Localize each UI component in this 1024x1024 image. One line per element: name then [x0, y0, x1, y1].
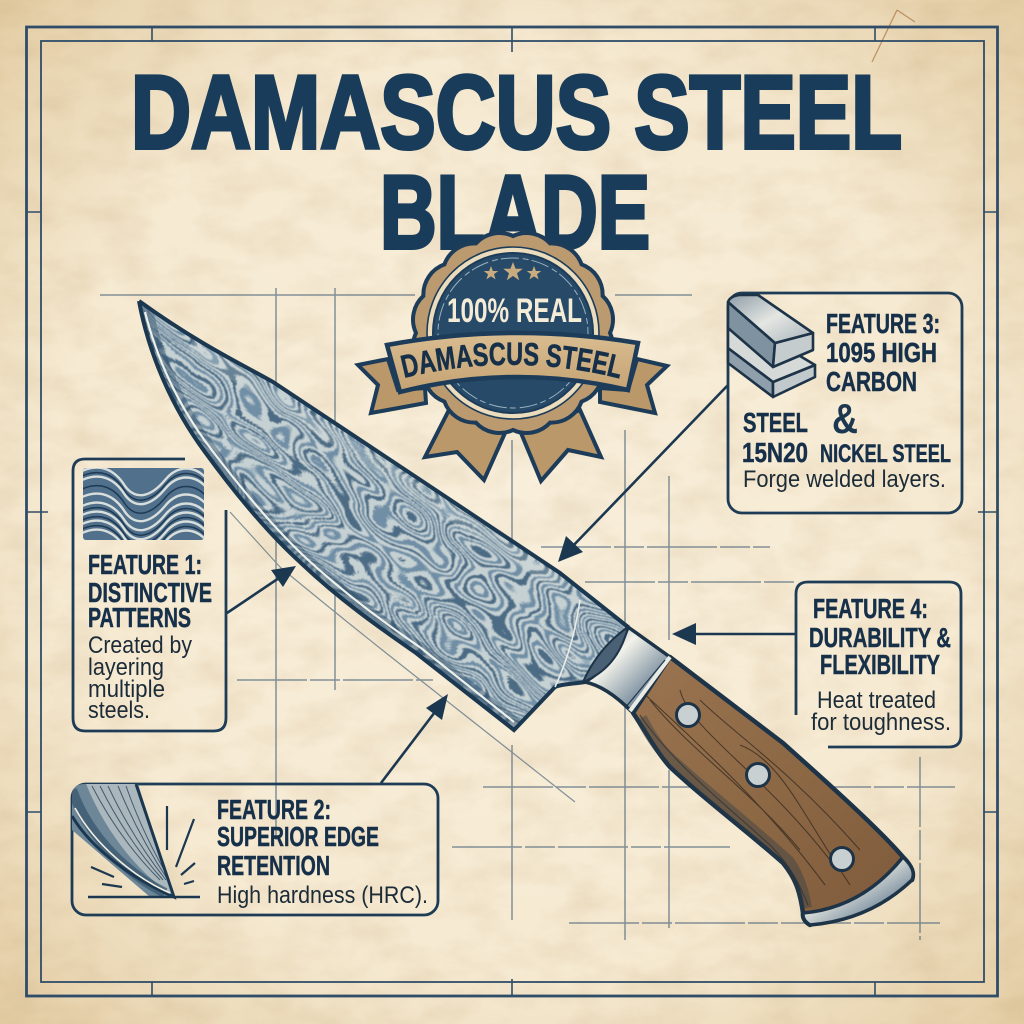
- heading: FEATURE 1:: [88, 549, 202, 580]
- heading: FEATURE 4:: [813, 593, 928, 624]
- heading: [809, 593, 951, 680]
- seal inner circle: [427, 247, 599, 419]
- handle butt cap: [803, 857, 913, 925]
- arrow: feature 1: [227, 566, 296, 613]
- heading: RETENTION: [217, 850, 330, 881]
- description: layering: [88, 654, 164, 681]
- description: Forge welded layers.: [743, 466, 946, 493]
- ribbon tails: [358, 359, 667, 413]
- heading: CARBON: [826, 366, 917, 397]
- blueprint grid lines: [100, 288, 955, 940]
- description: multiple: [88, 676, 165, 703]
- panel: feature 4: [796, 582, 961, 747]
- heading: 15N20: [742, 437, 808, 468]
- ribbon band: [387, 333, 638, 392]
- rivets: [676, 704, 854, 870]
- heading: &: [832, 395, 858, 442]
- panel: feature 3: [728, 293, 962, 513]
- heading: [742, 308, 951, 468]
- heading: DISTINCTIVE: [88, 577, 212, 608]
- heading: [88, 549, 212, 633]
- arrow: feature 2: [381, 694, 448, 783]
- description: Created by: [88, 632, 192, 659]
- panel: feature 1: [73, 459, 226, 731]
- heading: STEEL: [743, 407, 808, 438]
- box: [796, 582, 961, 747]
- icon: blade edge: [70, 784, 200, 899]
- description: [88, 632, 192, 724]
- heading: [217, 794, 379, 881]
- badge text: 100% real: 100% REAL: [447, 292, 582, 330]
- stars: [484, 262, 541, 280]
- rosette tails: [425, 408, 601, 481]
- heading: FEATURE 2:: [217, 794, 331, 825]
- heading: PATTERNS: [88, 602, 191, 633]
- panel: feature 2: [70, 784, 438, 915]
- ribbon text: DAMASCUS STEEL: [400, 342, 620, 379]
- handle: [633, 657, 913, 925]
- box: [728, 293, 962, 513]
- heading: FLEXIBILITY: [820, 649, 940, 680]
- icon: steel bars: [728, 295, 815, 397]
- description: steels.: [88, 697, 150, 724]
- description: Heat treated: [817, 687, 936, 714]
- heading: NICKEL STEEL: [820, 440, 951, 468]
- knife: [92, 292, 964, 928]
- box: [73, 459, 226, 731]
- heading: DURABILITY &: [809, 622, 951, 653]
- box: [72, 784, 438, 915]
- scalloped seal: [413, 233, 613, 433]
- description: [811, 687, 951, 736]
- title: [131, 55, 902, 271]
- heading: FEATURE 3:: [826, 308, 940, 339]
- title: BLADE: [380, 155, 650, 271]
- icon: pattern swatch: [83, 468, 204, 540]
- description: for toughness.: [811, 709, 951, 736]
- arrow: feature 3: [558, 385, 728, 562]
- blade with Damascus pattern: [137, 299, 629, 733]
- heading: SUPERIOR EDGE: [217, 821, 379, 852]
- heading: 1095 HIGH: [826, 337, 937, 368]
- description: High hardness (HRC).: [217, 882, 428, 909]
- badge: 100% real Damascus steel: [354, 232, 671, 485]
- bolster: [583, 627, 670, 711]
- arrow: feature 4: [672, 623, 796, 645]
